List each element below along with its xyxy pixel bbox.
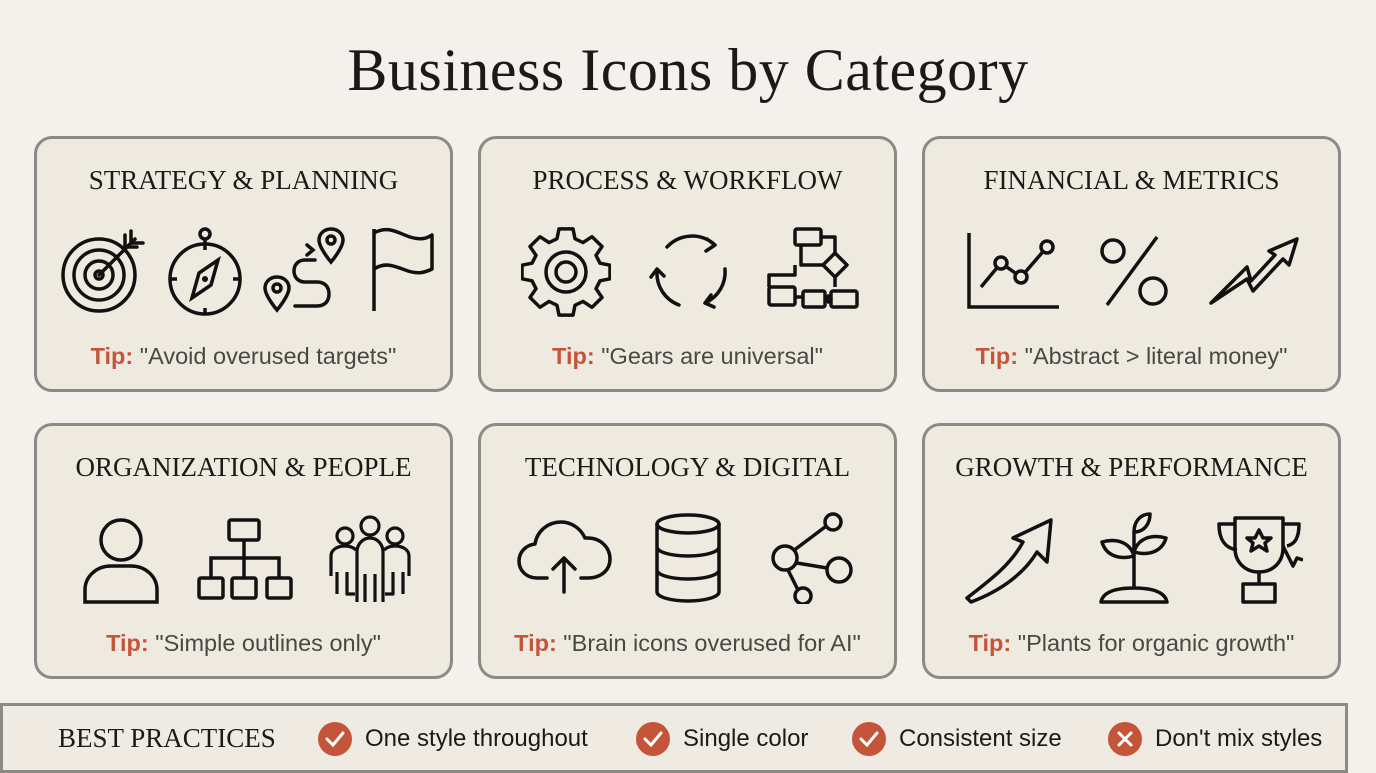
item: consistent size: [852, 722, 1062, 756]
title: Business Icons by Category: [347, 37, 1029, 103]
icons: technology: [517, 512, 853, 604]
heading: growth: GROWTH & PERFORMANCE: [955, 452, 1308, 482]
item: one style: One style throughout: [365, 725, 588, 752]
heading: organization: ORGANIZATION & PEOPLE: [76, 452, 411, 482]
item: one style: [318, 722, 588, 756]
heading: process: PROCESS & WORKFLOW: [532, 165, 843, 195]
tip: growth: Tip: "Plants for organic growth": [969, 630, 1294, 656]
tip: organization: Tip: "Simple outlines only": [106, 630, 381, 656]
panel: strategy & planning: [34, 136, 453, 392]
tip: financial: Tip: "Abstract > literal money": [975, 343, 1288, 369]
heading: technology: TECHNOLOGY & DIGITAL: [525, 452, 850, 482]
item: consistent size: Consistent size: [899, 725, 1062, 752]
icons: growth: [965, 512, 1303, 604]
panel: process & workflow: [478, 136, 897, 392]
panel: technology & digital: [478, 423, 897, 679]
icons: financial: [967, 233, 1299, 309]
item: don't mix: Don't mix styles: [1155, 725, 1322, 752]
panel: organization & people: [34, 423, 453, 679]
item: single color: [636, 722, 808, 756]
item: single color: Single color: [683, 725, 808, 752]
heading: strategy: STRATEGY & PLANNING: [89, 165, 398, 195]
tip: process: Tip: "Gears are universal": [552, 343, 823, 369]
tip: technology: Tip: "Brain icons overused for AI": [514, 630, 861, 656]
heading: financial: FINANCIAL & METRICS: [983, 165, 1280, 195]
icons: process: [521, 227, 859, 317]
tip: strategy: Tip: "Avoid overused targets": [91, 343, 396, 369]
panel: financial & metrics: [922, 136, 1341, 392]
icons: organization: [83, 515, 411, 604]
bar heading: BEST PRACTICES: [58, 723, 276, 753]
icons: strategy: [61, 227, 434, 316]
item: don't mix: [1108, 722, 1322, 756]
panel: growth & performance: [922, 423, 1341, 679]
best practices bar: [0, 703, 1348, 773]
